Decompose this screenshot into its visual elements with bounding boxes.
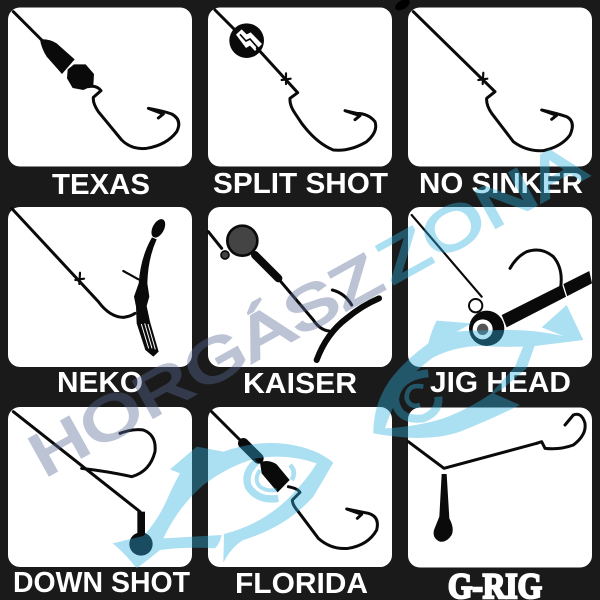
panel: Down shot rig xyxy=(8,407,192,599)
rig drawing: Jig head xyxy=(412,215,592,346)
watermark: lower fish xyxy=(113,443,333,568)
rig drawing: Kaiser xyxy=(208,226,379,360)
panel: Texas rig xyxy=(8,8,192,201)
rig drawing: Split shot xyxy=(215,10,376,150)
panel: Florida rig xyxy=(208,407,392,600)
label: FLORIDA: FLORIDA xyxy=(235,568,368,600)
rig drawing: Down shot xyxy=(13,412,155,556)
panel: Split shot rig xyxy=(208,8,392,200)
watermark: upper fish xyxy=(373,305,583,438)
watermark text: gray part: HORGÁSZ xyxy=(18,241,393,489)
watermark: HORGÁSZZONA text xyxy=(18,129,595,489)
ink blot at top edge xyxy=(393,0,412,13)
label: NO SINKER: NO SINKER xyxy=(419,168,583,200)
watermark text: blue part: ZONA xyxy=(366,129,595,296)
label: JIG HEAD: JIG HEAD xyxy=(430,367,571,399)
rig drawing: G-Rig xyxy=(408,414,585,542)
panel: Jig head rig xyxy=(408,207,592,399)
rig drawing: Neko xyxy=(12,208,168,357)
rig drawing: No sinker xyxy=(413,12,572,151)
panel: No sinker rig xyxy=(408,8,592,200)
label: KAISER: KAISER xyxy=(243,368,357,400)
label: TEXAS: TEXAS xyxy=(52,169,150,201)
label: SPLIT SHOT: SPLIT SHOT xyxy=(213,168,388,200)
panel: G-Rig xyxy=(408,408,592,600)
rig drawing: Florida xyxy=(212,412,377,549)
panel: Neko rig xyxy=(8,207,192,399)
panel: Kaiser rig xyxy=(208,207,392,400)
label: DOWN SHOT: DOWN SHOT xyxy=(13,567,190,599)
label: NEKO: NEKO xyxy=(57,367,143,399)
rig drawing: Texas xyxy=(13,12,179,149)
